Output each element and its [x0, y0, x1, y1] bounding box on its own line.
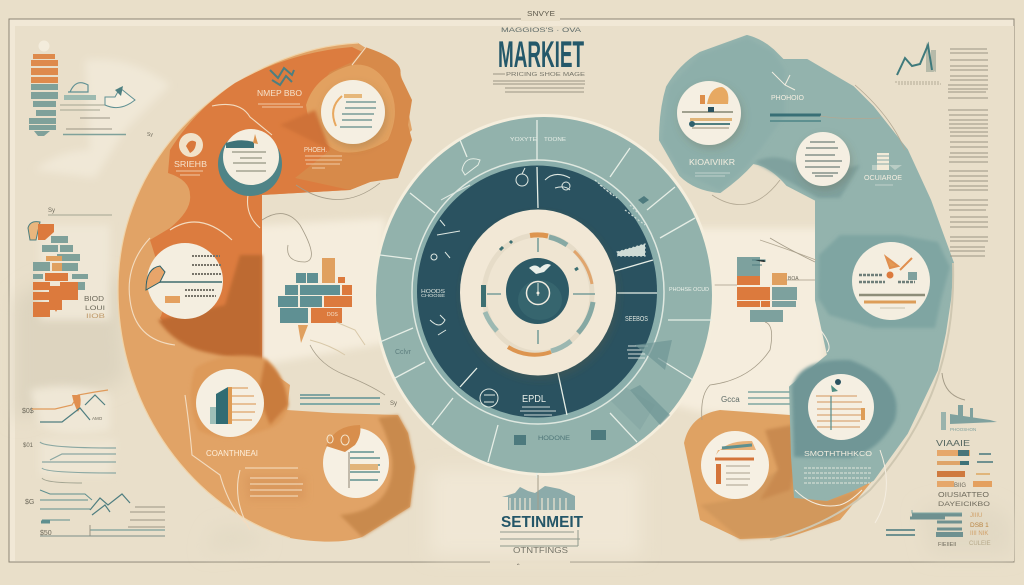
text: right blob label	[864, 153, 902, 185]
heading: SETINMEIT	[501, 514, 583, 531]
chart: top-right sparkline	[895, 42, 941, 84]
text: lower label: COANTHNEAI	[206, 449, 258, 458]
circle: right 2	[796, 132, 850, 186]
dial text: PHOHSE OCUD	[669, 287, 709, 293]
text: left blob label	[689, 158, 735, 176]
text: lower teal label: SMOTHTHHKCO	[804, 449, 872, 458]
footer title block	[490, 475, 583, 567]
rules	[493, 74, 585, 92]
panel: left orange market arc	[118, 43, 415, 542]
connector curves	[795, 320, 886, 523]
note lines: center-right: Gcca	[721, 395, 740, 404]
note lines: center-right	[721, 392, 790, 404]
text: top label	[257, 89, 303, 107]
dial text	[395, 137, 709, 442]
blob: upper right lumps	[295, 47, 412, 190]
connector curves	[129, 47, 366, 530]
text: right label	[304, 147, 342, 168]
text: lower label	[206, 449, 303, 496]
blob: lower shades	[340, 415, 415, 537]
chart: right bars legend: JIIIU	[970, 513, 982, 519]
chart: right bars legend: FIEIIEII	[938, 542, 957, 548]
eyebrow: SNVYE	[527, 11, 555, 18]
outer ring	[373, 114, 715, 476]
dial text: TOONE	[544, 137, 566, 143]
blob: middle lump	[191, 356, 288, 438]
circle: right 1	[677, 81, 741, 145]
text: left badge	[174, 133, 207, 175]
chart: left bricks: BIOD	[84, 296, 104, 303]
dial text: SEEBOS	[625, 316, 648, 323]
dial text: HODONE	[538, 435, 571, 442]
dial text: HOODS	[421, 289, 445, 295]
chart: top-left stack	[29, 40, 153, 138]
chart: center-left bricks: DOS	[327, 312, 338, 318]
chart: right bars legend: DSB 1	[970, 522, 989, 529]
upper darker band	[150, 47, 400, 365]
circle: right 4	[808, 374, 874, 440]
footer title block: 2	[517, 561, 520, 567]
chart: center-left bricks	[278, 258, 365, 355]
circle: right 3	[852, 242, 930, 320]
chart: left line chart 3	[25, 490, 165, 537]
text: teal labels: PHOHOIO	[771, 95, 805, 102]
heading: VIAAIE	[936, 439, 970, 448]
brown shade below circle	[158, 255, 262, 364]
center globe	[506, 258, 569, 324]
chart: left line chart 1: AMO	[92, 416, 103, 421]
inner ring stroke	[412, 160, 664, 424]
icon: top label glyphs	[270, 68, 294, 85]
ticks	[487, 238, 595, 344]
note lines: center-left: Sy	[390, 401, 397, 407]
chart: center-right bricks: BOA	[788, 276, 799, 282]
chart: right bars legend: BIIG	[954, 483, 966, 489]
circle: left 5	[323, 425, 389, 498]
bars	[937, 450, 970, 456]
dial icons	[430, 168, 570, 407]
heading: MARKIET	[498, 34, 584, 75]
chart: right bars legend: CULEIE	[969, 541, 991, 547]
chart: left line chart 1: $0$	[22, 408, 34, 415]
text: right blob label: OCUIAROE	[864, 175, 902, 182]
text: top label: NMEP BBO	[257, 89, 302, 98]
dial text: YOXYTE	[510, 137, 537, 143]
text: left badge: SRIEHB	[174, 160, 207, 169]
chart: left bricks	[28, 208, 112, 320]
text: right label: PHOEH.	[304, 147, 327, 154]
dial text: EPDL	[522, 394, 546, 405]
chart: right bars legend: IIII NIK	[970, 531, 988, 537]
chart: top-left stack: Sy	[147, 132, 153, 138]
circle: left 2	[218, 129, 282, 196]
panel: central cream field	[255, 218, 825, 420]
frame gap for eyebrow	[521, 17, 560, 21]
circle: left 4	[196, 369, 264, 437]
teal arc body	[660, 36, 953, 500]
panel: right teal market arc	[660, 36, 953, 540]
rules	[500, 530, 580, 546]
chart: left bricks: LOUI	[85, 306, 105, 312]
text: teal labels	[770, 72, 821, 121]
info circles	[146, 80, 930, 499]
chart: right skyline	[941, 373, 997, 432]
text: left blob label: KIOAIVIIKR	[689, 158, 735, 167]
subtitle: MAGGIOS'S · OVA	[501, 27, 582, 34]
orange arc body	[118, 43, 415, 542]
teal shading	[662, 38, 785, 190]
chart: left line chart 3: $G	[25, 499, 34, 506]
chart: left bricks: Sy	[48, 208, 55, 214]
chart: right bars legend	[886, 439, 993, 548]
circle: right 5	[701, 431, 769, 499]
labels: OIUSIATTEO	[938, 492, 990, 499]
dial cream disk	[460, 210, 616, 376]
lower orange tail	[684, 410, 873, 539]
dial bars	[595, 180, 645, 256]
circle: left 3	[146, 243, 223, 319]
chart: left bricks: IIOB	[86, 314, 105, 320]
circle: left 1	[321, 80, 385, 144]
dial text: CHOOSE	[421, 293, 445, 298]
subheading: PRICING SHOE MAGE	[506, 72, 586, 78]
ring arcs	[484, 235, 593, 355]
chart: right skyline: PHOOSHON	[950, 427, 976, 432]
chart: right bars legend: DAYEICIKBO	[938, 501, 990, 508]
chart: center-right bricks	[702, 238, 815, 420]
title block	[493, 11, 586, 92]
chart: left line chart 1	[22, 390, 108, 422]
dial text: Cclvr	[395, 349, 412, 356]
text: lower teal label	[804, 449, 872, 483]
icon: skyline	[502, 475, 575, 510]
chart: central dial	[373, 114, 715, 478]
chart: left lines 2: $01	[23, 443, 34, 449]
chart: left lines 2	[23, 442, 116, 483]
dark ring	[417, 166, 657, 418]
subheading: OTNTFINGS	[513, 546, 568, 555]
text: right column lines	[948, 49, 988, 256]
segment lines	[380, 120, 712, 478]
note lines: center-left	[300, 345, 397, 407]
chart: left line chart 3: $50	[40, 530, 52, 537]
